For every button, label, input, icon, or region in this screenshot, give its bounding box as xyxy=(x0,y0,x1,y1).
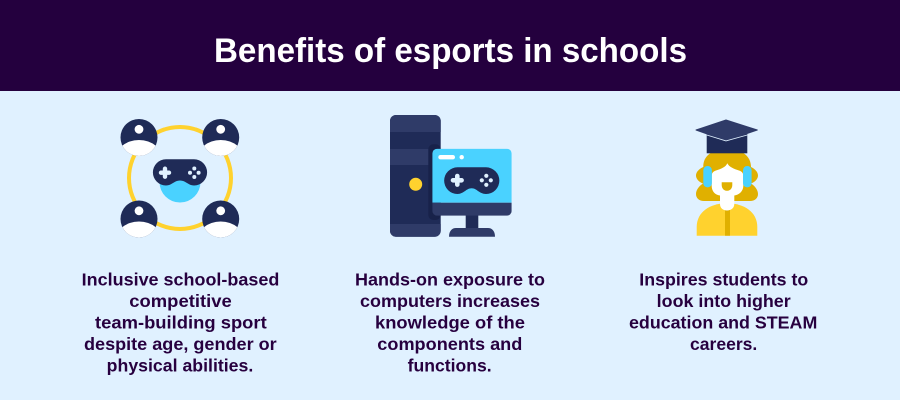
text: inspires students: Inspires students to xyxy=(639,270,808,290)
icon: person top left xyxy=(120,119,158,156)
text: inspires students: education and STEAM xyxy=(629,312,817,332)
text: inclusive sport: physical abilities. xyxy=(107,356,253,376)
text: inspires students: look into higher xyxy=(657,291,791,311)
text: hands-on exposure: computers increases xyxy=(360,291,540,311)
text: hands-on exposure: components and xyxy=(377,334,522,354)
icon: person bottom left xyxy=(120,200,158,238)
text: inclusive sport: Inclusive school-based xyxy=(82,270,279,290)
title: Benefits of esports in schools xyxy=(214,32,687,70)
header band xyxy=(0,0,900,91)
text: inclusive sport: team-building sport xyxy=(95,312,267,332)
icon: team around gamepad xyxy=(120,119,240,238)
text: hands-on exposure xyxy=(355,270,545,376)
text: inspires students xyxy=(629,270,817,354)
text: inclusive sport: competitive xyxy=(129,291,232,311)
icon: person top right xyxy=(202,119,240,156)
text: inclusive sport xyxy=(82,270,279,376)
text: inclusive sport: despite age, gender or xyxy=(84,334,277,354)
icon: person bottom right xyxy=(202,200,240,238)
icon: graduate student xyxy=(696,120,758,236)
text: inspires students: careers. xyxy=(690,334,757,354)
text: hands-on exposure: functions. xyxy=(408,356,492,376)
text: hands-on exposure: knowledge of the xyxy=(375,312,525,332)
icon: computer tower and monitor xyxy=(390,115,512,237)
text: hands-on exposure: Hands-on exposure to xyxy=(355,270,545,290)
